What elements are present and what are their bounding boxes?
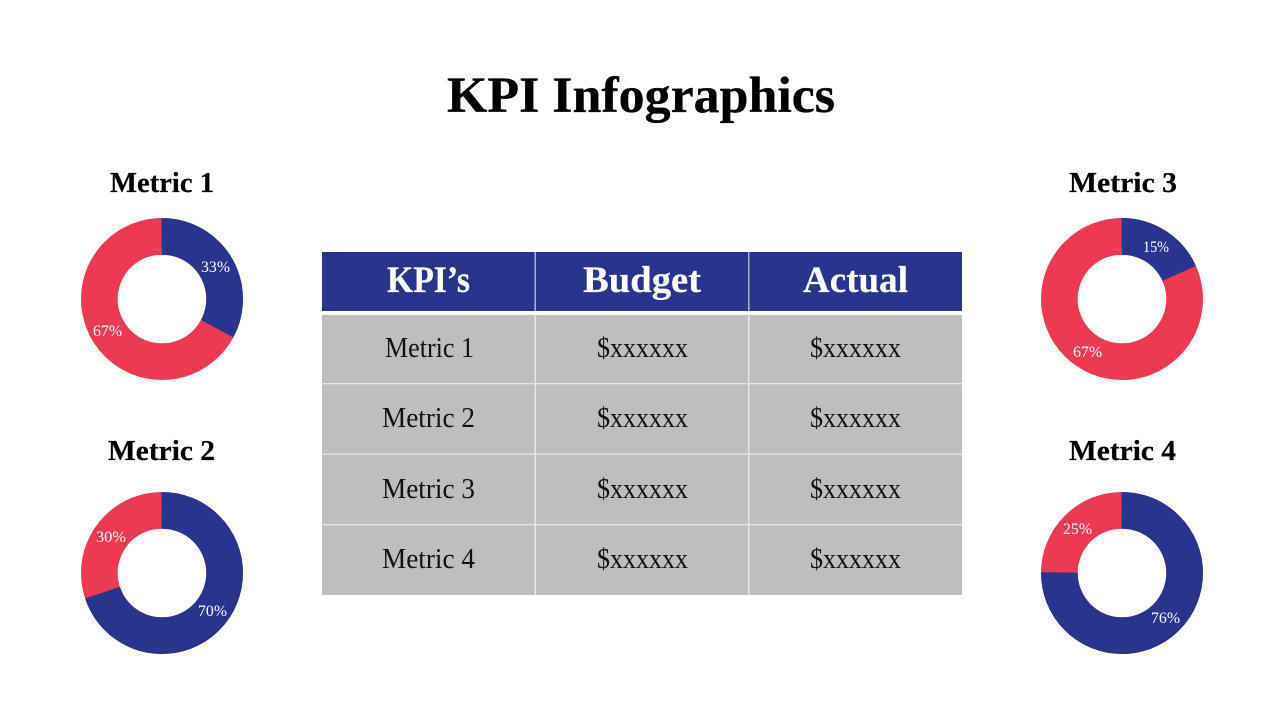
panel: metric 2	[96, 435, 227, 636]
table body: $xxxxxx	[597, 474, 688, 505]
table body: $xxxxxx	[597, 544, 688, 575]
table body: $xxxxxx	[810, 333, 901, 364]
donut chart: metric 3	[1059, 236, 1185, 362]
panel: metric 1	[93, 167, 230, 362]
table body: Metric 3	[382, 474, 475, 505]
heading: metric 3: Metric 3	[1069, 167, 1177, 199]
donut chart: metric 1	[93, 236, 230, 362]
donut chart: metric 3: 67%	[1073, 344, 1102, 361]
table body: $xxxxxx	[810, 403, 901, 434]
table: KPI budget vs actual	[322, 252, 962, 595]
table body: Metric 1	[385, 333, 474, 364]
title: KPI Infographics	[447, 68, 835, 124]
donut chart: metric 2: 70%	[198, 603, 227, 620]
table body: $xxxxxx	[597, 403, 688, 434]
table body: Metric 4	[382, 544, 475, 575]
donut chart: metric 1: 67%	[93, 323, 122, 340]
heading: metric 1: Metric 1	[110, 167, 214, 199]
table header: Budget	[583, 260, 702, 301]
donut chart: metric 3: 15%	[1143, 239, 1169, 256]
table body: Metric 2	[382, 403, 475, 434]
table header	[322, 252, 962, 311]
table header: Actual	[803, 260, 908, 301]
heading: metric 4: Metric 4	[1069, 435, 1176, 467]
donut chart: metric 2: 30%	[96, 529, 126, 546]
heading: metric 2: Metric 2	[108, 435, 215, 467]
panel: metric 3	[1059, 167, 1185, 362]
donut chart: metric 4: 76%	[1151, 610, 1180, 627]
donut chart: metric 1: 33%	[201, 259, 230, 276]
table body: $xxxxxx	[810, 544, 901, 575]
table body: $xxxxxx	[810, 474, 901, 505]
table header: KPI’s	[387, 260, 470, 301]
donut chart: metric 2	[96, 510, 227, 636]
table body: $xxxxxx	[597, 333, 688, 364]
donut chart: metric 4: 25%	[1063, 521, 1092, 538]
table body	[322, 315, 962, 595]
donut chart: metric 4	[1059, 510, 1185, 636]
panel: metric 4	[1059, 435, 1185, 636]
